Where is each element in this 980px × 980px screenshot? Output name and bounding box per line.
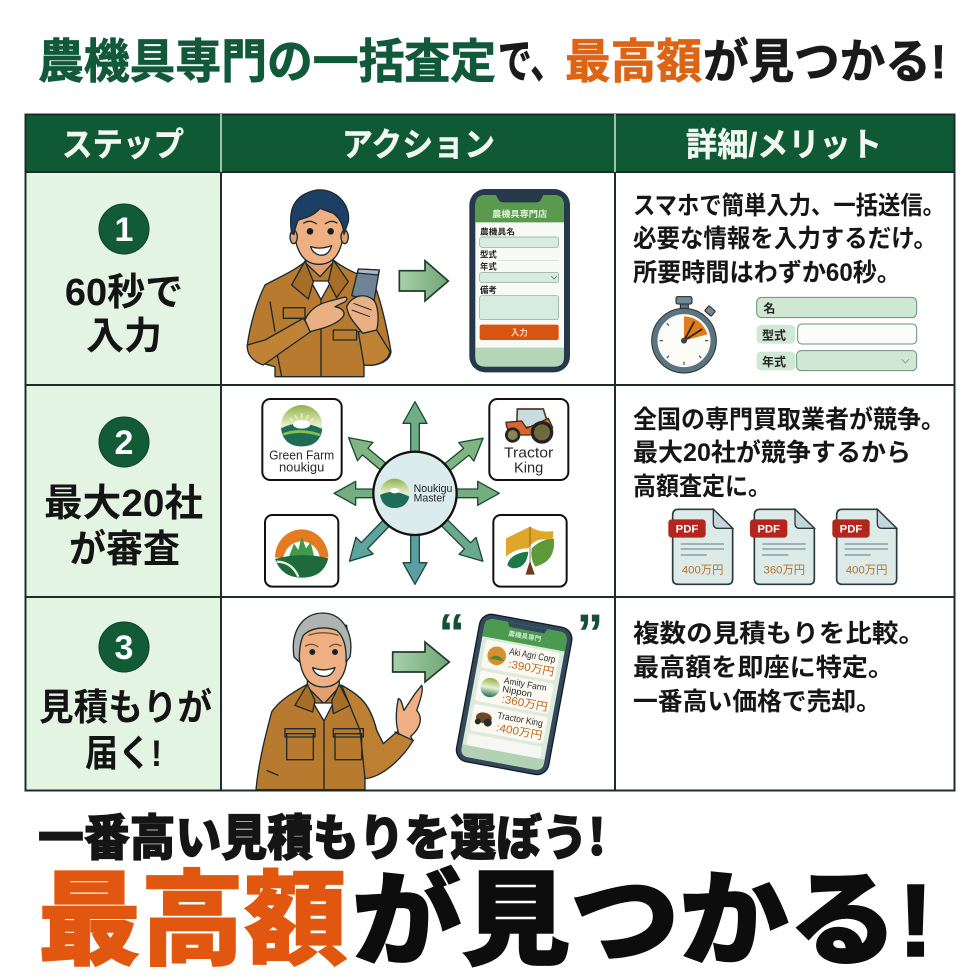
detail text 1: 所要時間はわずか60秒。: [633, 259, 901, 287]
detail text 2: [633, 405, 945, 501]
logo card: leaf: [493, 515, 567, 587]
detail text 2: 最大20社が競争するから: [633, 438, 911, 467]
table frame: [25, 114, 955, 790]
step 2 label: 2: [115, 424, 133, 462]
subheading: 一番高い見積もりを選ぼう!: [38, 799, 606, 870]
step 2 label: が審査: [69, 529, 180, 571]
quote card 390万円: :390万円: [507, 658, 555, 679]
icon: smartphone form: 入力: [511, 328, 528, 338]
logo card: sunrise field: [265, 515, 338, 587]
title: 最高額: [565, 35, 702, 88]
icon: smartphone form: 農機具名: [480, 226, 515, 236]
icon: phone with quote list: 農機具専門: [508, 629, 542, 644]
pdf 400万円: 400万円: [682, 564, 723, 576]
quote card 390万円: Aki Agri Corp: [508, 646, 556, 666]
closing headline: 最高額: [38, 863, 347, 978]
form fields: [757, 297, 917, 371]
title: 農機具専門の一括査定: [38, 35, 496, 88]
detail text 1: [633, 192, 945, 287]
step 3 label: 届く!: [85, 733, 162, 774]
detail text 1: スマホで簡単入力、一括送信。: [633, 192, 945, 220]
title: で、: [498, 35, 564, 88]
table header labels: [62, 126, 882, 163]
icon: smartphone form: 農機具専門店: [492, 208, 548, 219]
pdf 400万円 second: [832, 509, 897, 584]
arrow: [399, 261, 448, 301]
form fields: 名: [763, 300, 775, 315]
quote card 400万円: Tractor King: [497, 710, 544, 729]
step 1 label: 1: [115, 211, 133, 249]
quote card 360万円: Nippon: [502, 684, 533, 699]
table header labels: ステップ: [62, 126, 184, 163]
step 3 label: 3: [115, 629, 133, 667]
quote card 360万円: Amity Farm: [503, 675, 548, 693]
PDF quote documents: [668, 509, 897, 584]
quote card 360万円: :360万円: [500, 694, 549, 714]
icon: smartphone form: 型式: [480, 250, 497, 260]
detail text 1: 必要な情報を入力するだけ。: [633, 225, 937, 253]
detail 1 graphics: [652, 297, 917, 373]
closing headline: [38, 863, 934, 978]
quote card 360万円: [475, 670, 554, 714]
icon: smartphone form: 備考: [480, 285, 497, 295]
logo card: Tractor King: King: [514, 461, 543, 477]
logo card: Green Farm noukigu: noukigu: [279, 459, 324, 474]
detail text 3: 複数の見積もりを比較。: [633, 620, 925, 648]
step 3 label: [39, 622, 212, 774]
step 1 label: [65, 204, 183, 358]
hub: Noukigu Master: Noukigu: [414, 483, 452, 495]
icon: young farmer with smartphone: [247, 190, 391, 377]
pdf 400万円: [668, 509, 733, 584]
logo card: Tractor King: [489, 399, 568, 480]
logo card: Green Farm noukigu: [262, 399, 342, 480]
pdf 360万円: PDF: [757, 524, 780, 536]
icon: stopwatch: [652, 297, 716, 373]
pdf 400万円 second: PDF: [840, 524, 862, 536]
icon: smartphone form: 年式: [480, 262, 497, 272]
detail text 2: 高額査定に。: [633, 473, 771, 501]
form fields: 年式: [762, 354, 786, 369]
pdf 360万円: [750, 509, 814, 584]
detail text 3: 最高額を即座に特定。: [633, 654, 894, 682]
detail text 3: [633, 620, 925, 716]
hub: Noukigu Master: Master: [414, 492, 446, 504]
detail text 3: 一番高い価格で売却。: [633, 688, 881, 716]
quote card 390万円: [481, 640, 560, 681]
detail text 2: 全国の専門買取業者が競争。: [633, 405, 945, 434]
table header labels: アクション: [342, 126, 495, 163]
title: が見つかる!: [703, 35, 946, 88]
logo card: Green Farm noukigu: Green Farm: [269, 447, 334, 462]
hub: Noukigu Master: [373, 452, 457, 535]
quote marks: ”: [577, 605, 603, 664]
step 2 label: [44, 417, 203, 571]
arrows radiating from hub: [334, 402, 499, 584]
action 1 illustration: [247, 189, 570, 377]
step 3 label: 見積もりが: [39, 687, 212, 728]
action 3 illustration: [256, 605, 603, 790]
pdf 400万円: PDF: [676, 524, 698, 536]
action 2 illustration: [262, 399, 568, 587]
icon: senior farmer pointing: [256, 613, 422, 790]
quote card 400万円: [469, 704, 548, 744]
title: [38, 35, 946, 88]
pdf 400万円 second: 400万円: [846, 564, 887, 576]
icon: smartphone form: [469, 189, 570, 372]
step 1 label: 入力: [86, 316, 162, 358]
step 1 label: 60秒で: [65, 272, 183, 314]
closing headline: が見つかる!: [352, 863, 934, 978]
logo card: Tractor King: Tractor: [504, 445, 554, 461]
form fields: 型式: [762, 328, 786, 343]
step 2 label: 最大20社: [44, 483, 203, 525]
quote card 400万円: :400万円: [495, 722, 543, 742]
quote marks: “: [438, 605, 465, 664]
icon: phone with quote list: [454, 612, 574, 777]
quote marks: [438, 605, 603, 664]
pdf 360万円: 360万円: [764, 564, 805, 576]
arrow: [393, 642, 449, 682]
table header labels: 詳細/メリット: [686, 126, 882, 163]
